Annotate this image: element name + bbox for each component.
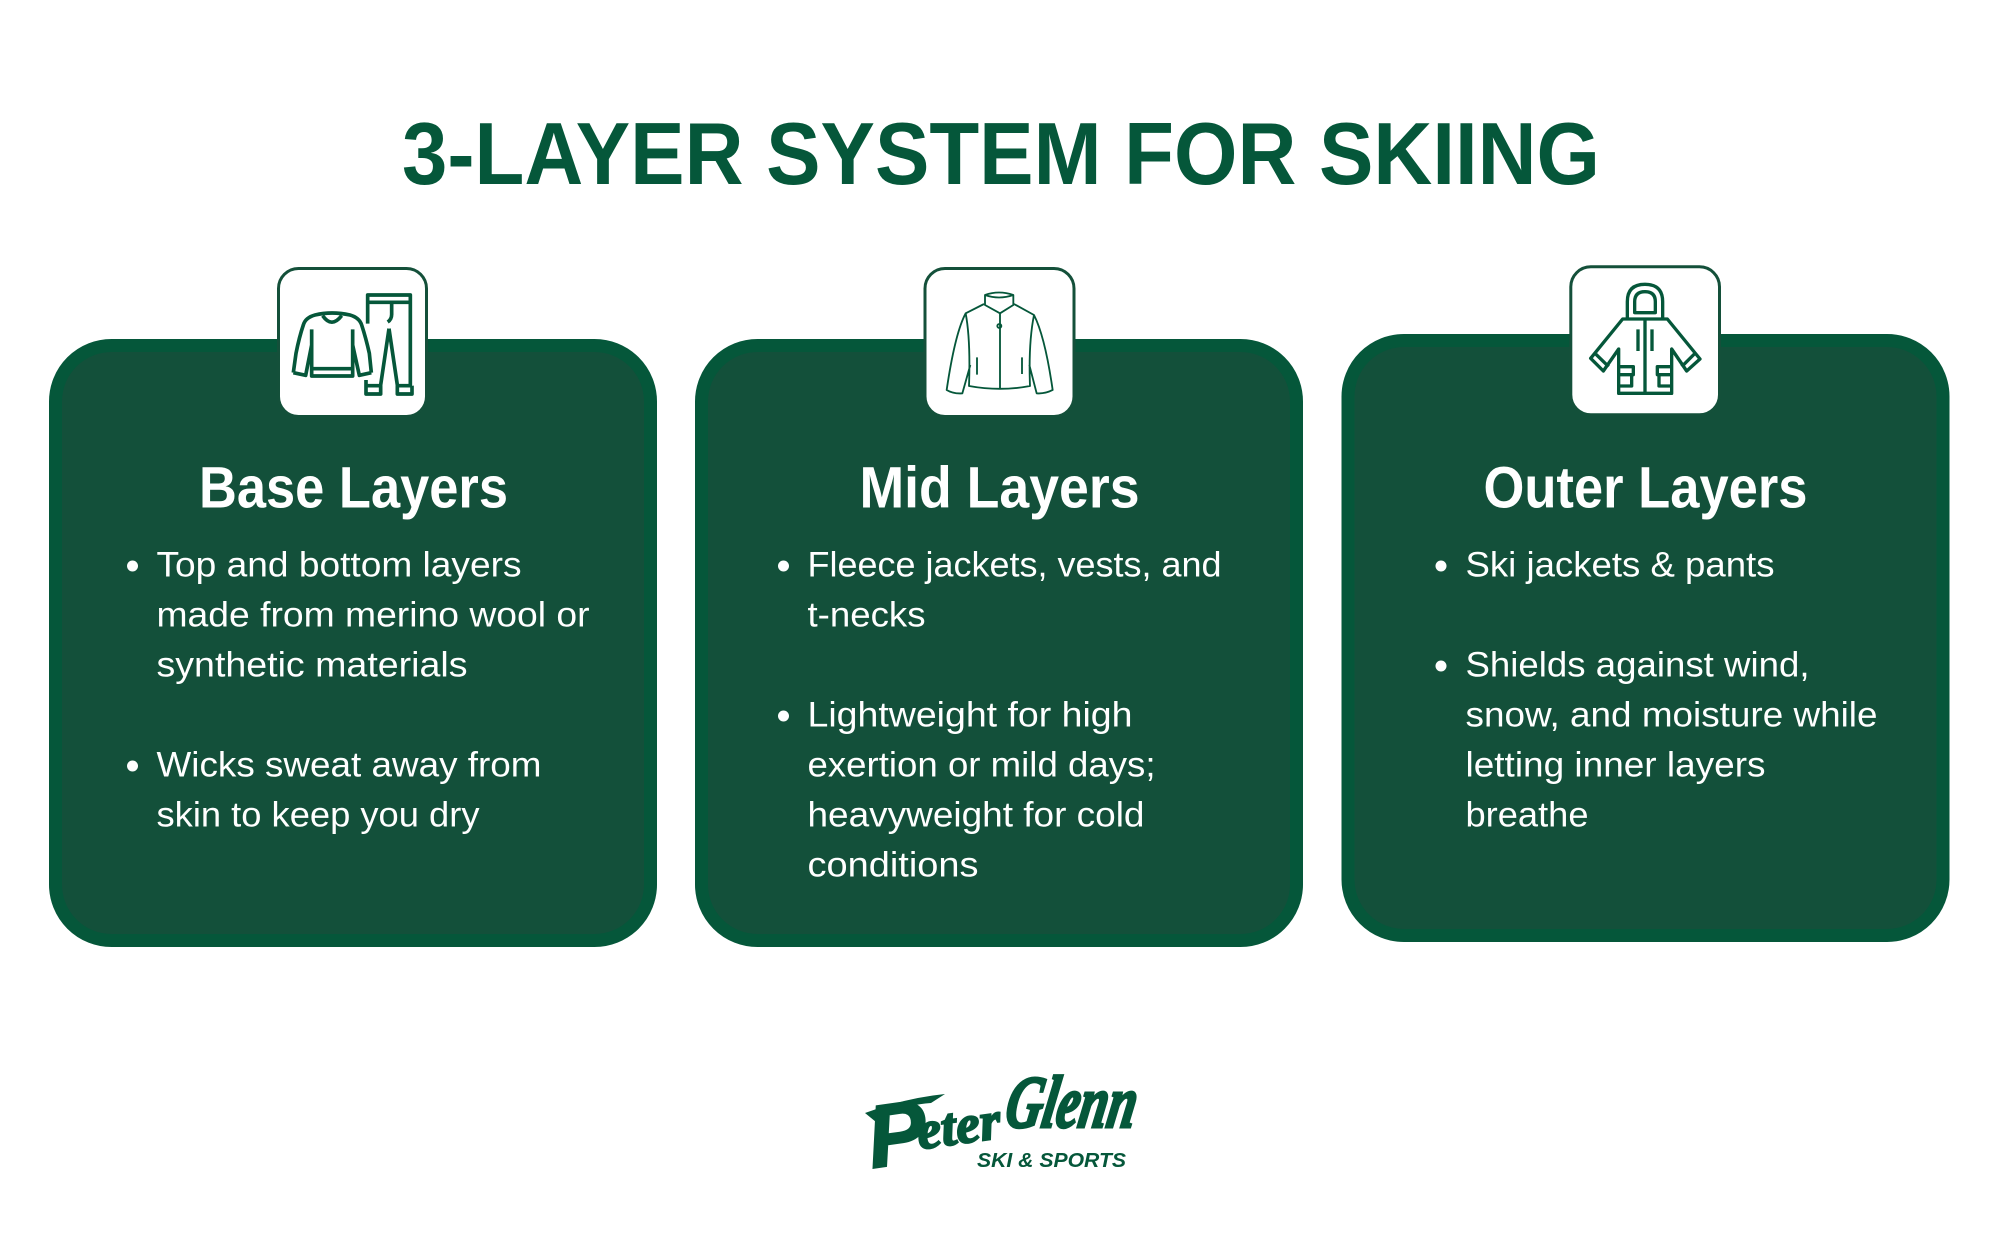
bullet list: mid layers — [778, 544, 1222, 884]
icon: sweater and pants — [278, 268, 426, 416]
title: 3-LAYER SYSTEM FOR SKIING — [402, 104, 1600, 203]
logo: Peter Glenn Ski & Sports: P — [861, 1081, 933, 1187]
panel: outer layers — [1348, 267, 1943, 936]
bullet list: base layers: Top and bottom layers — [156, 544, 522, 584]
logo: Peter Glenn Ski & Sports: Glenn — [1000, 1062, 1144, 1144]
logo: Peter Glenn Ski & Sports — [861, 1062, 1144, 1187]
icon: ski jacket with hood — [1571, 267, 1720, 415]
bullet list: outer layers — [1436, 544, 1878, 834]
heading: outer layers: Outer Layers — [1484, 456, 1808, 520]
bullet list: outer layers: Ski jackets & pants — [1466, 544, 1774, 584]
icon: fleece jacket — [925, 268, 1074, 416]
bullet list: outer layers: snow, and moisture while — [1466, 694, 1878, 734]
bullet list: mid layers: heavyweight for cold — [808, 794, 1144, 834]
card background — [56, 346, 650, 940]
bullet list: mid layers: exertion or mild days; — [808, 744, 1156, 784]
card background — [702, 346, 1296, 940]
bullet list: mid layers: Lightweight for high — [808, 694, 1132, 734]
bullet list: base layers: Wicks sweat away from — [156, 744, 542, 784]
bullet list: base layers: synthetic materials — [156, 644, 468, 684]
logo: Peter Glenn Ski & Sports: eter — [913, 1090, 1005, 1161]
bullet list: mid layers: t-necks — [808, 594, 926, 634]
logo: Peter Glenn Ski & Sports: SKI & SPORTS — [977, 1149, 1126, 1172]
bullet list: base layers — [127, 544, 590, 834]
bullet list: base layers: made from merino wool or — [156, 594, 590, 634]
card background — [1348, 340, 1943, 936]
bullet list: mid layers: conditions — [808, 844, 978, 884]
panel: mid layers — [702, 268, 1296, 940]
bullet list: mid layers: Fleece jackets, vests, and — [808, 544, 1222, 584]
bullet list: outer layers: breathe — [1466, 794, 1588, 834]
bullet list: outer layers: letting inner layers — [1466, 744, 1766, 784]
bullet list: base layers: skin to keep you dry — [156, 794, 480, 834]
heading: mid layers: Mid Layers — [860, 456, 1140, 520]
panel: base layers — [56, 268, 650, 940]
bullet list: outer layers: Shields against wind, — [1466, 644, 1810, 684]
heading: base layers: Base Layers — [199, 456, 508, 520]
